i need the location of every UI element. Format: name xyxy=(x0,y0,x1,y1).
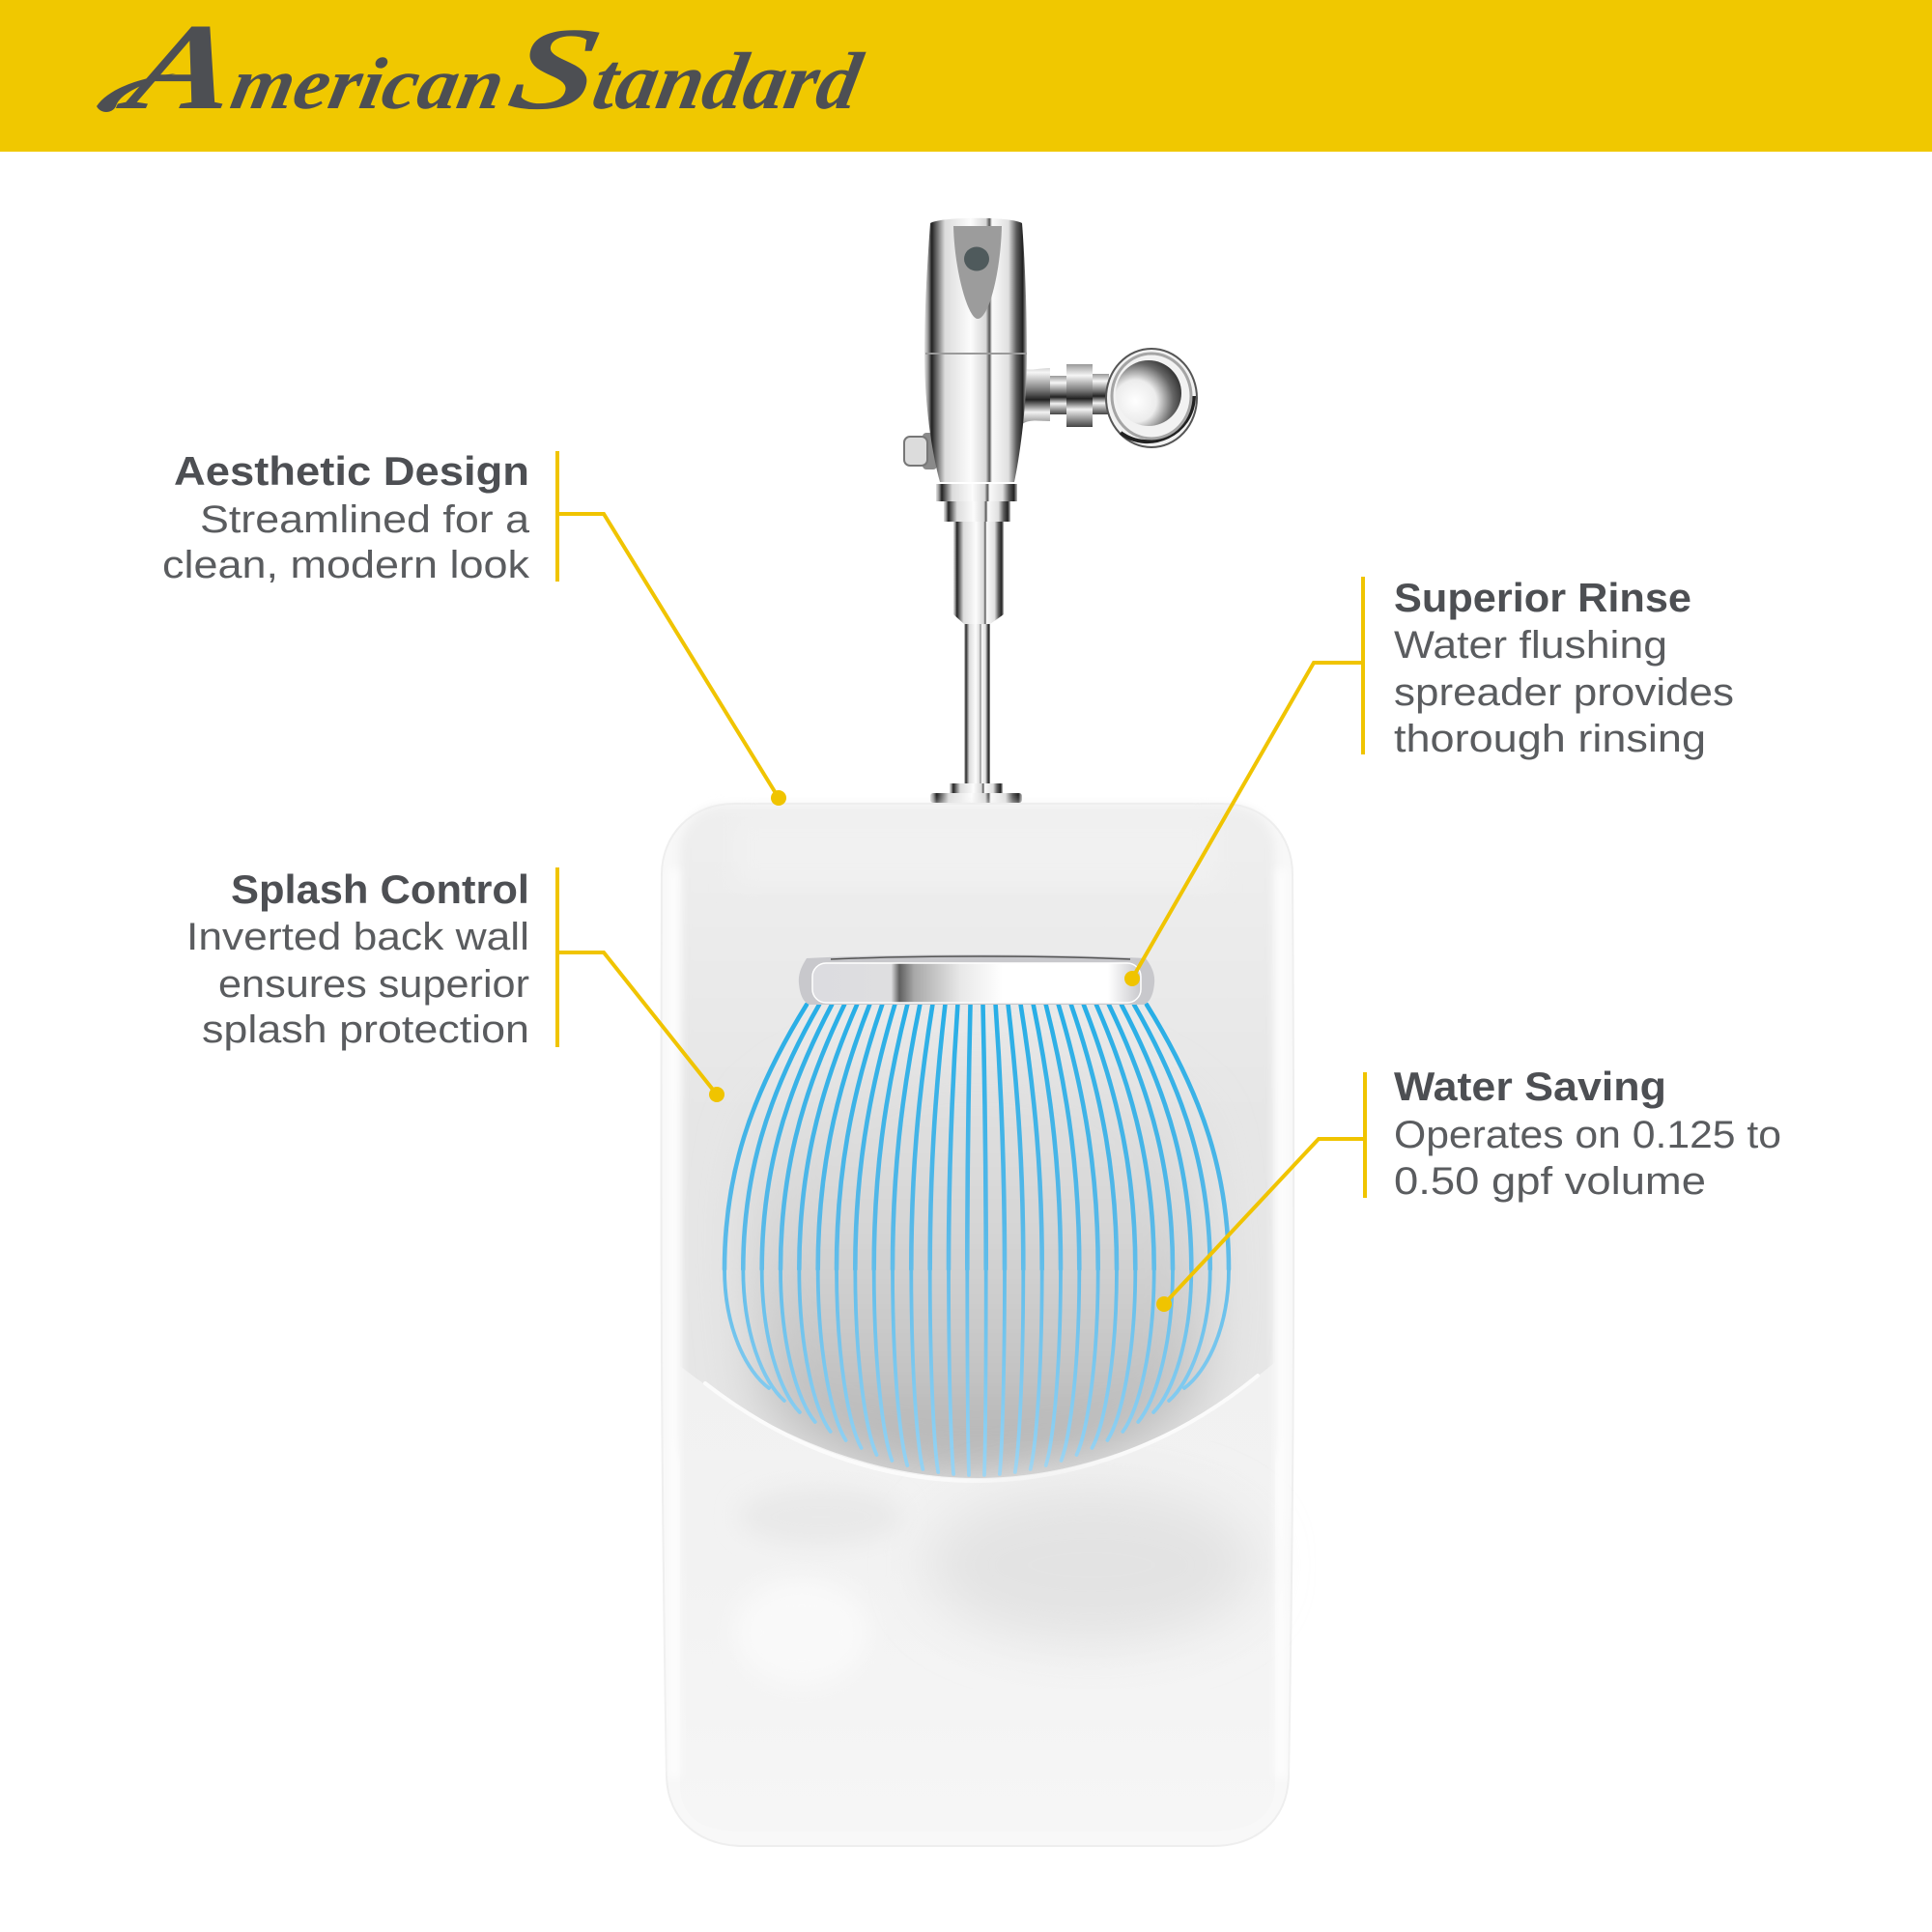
callout heading: Superior Rinse xyxy=(1394,575,1691,620)
logo: American Standard xyxy=(97,0,877,135)
logo wordmark: S xyxy=(499,3,611,134)
valve collar nuts xyxy=(936,484,1017,522)
callout heading: Splash Control xyxy=(231,867,529,912)
valve inlet ring xyxy=(1106,349,1197,447)
valve lower tube xyxy=(953,521,1004,624)
callout body: spreader provides xyxy=(1394,671,1734,714)
callout dot xyxy=(1156,1296,1172,1312)
callout body: Operates on 0.125 to xyxy=(1394,1114,1781,1156)
valve body seam xyxy=(925,353,1027,355)
logo wordmark: merican xyxy=(225,43,511,125)
flush valve xyxy=(904,218,1197,803)
callout dot xyxy=(1124,971,1140,986)
callout body: 0.50 gpf volume xyxy=(1394,1160,1706,1203)
valve sensor window xyxy=(953,226,1002,319)
spreader chrome bar xyxy=(799,954,1154,1005)
callout: Superior Rinse xyxy=(1124,575,1734,986)
callout: Water Saving xyxy=(1156,1064,1781,1312)
basin lower highlight xyxy=(734,1579,869,1686)
callout dot xyxy=(771,790,786,806)
urinal back wall xyxy=(680,806,1275,1482)
callout body: Inverted back wall xyxy=(186,916,529,958)
callout body xyxy=(162,498,530,586)
callout leader line xyxy=(1164,1072,1365,1304)
valve floor flange xyxy=(930,783,1022,803)
basin rim highlight xyxy=(705,1376,1258,1481)
callout body: Water flushing xyxy=(1394,624,1667,667)
callout body: thorough rinsing xyxy=(1394,718,1706,760)
top highlight band xyxy=(734,816,1217,884)
callout heading: Aesthetic Design xyxy=(174,448,529,494)
logo wordmark: tandard xyxy=(586,37,869,127)
callout body xyxy=(186,916,529,1051)
valve supply pipe xyxy=(964,618,990,784)
urinal fixture xyxy=(662,804,1293,1846)
callout: Aesthetic Design xyxy=(162,448,786,806)
water rinse lines xyxy=(724,1005,1229,1475)
callout leader line xyxy=(557,451,779,798)
callout body: clean, modern look xyxy=(162,544,530,586)
callout body: ensures superior xyxy=(218,963,529,1006)
logo swash xyxy=(97,73,176,112)
callout leader line xyxy=(1132,577,1363,979)
callout: Splash Control xyxy=(186,867,724,1102)
callout body xyxy=(1394,624,1734,760)
callout body xyxy=(1394,1114,1781,1203)
valve sensor eye xyxy=(964,247,989,270)
valve side arm xyxy=(1014,359,1109,433)
valve push button xyxy=(904,433,937,469)
water lines upper xyxy=(724,1005,1229,1269)
logo wordmark: A xyxy=(110,0,249,135)
header banner xyxy=(0,0,1932,152)
callout leader line xyxy=(557,867,717,1094)
urinal outer shell xyxy=(662,804,1293,1846)
basin soft shadow right xyxy=(927,1488,1256,1642)
callout body: Streamlined for a xyxy=(200,498,530,541)
callout dot xyxy=(709,1087,724,1102)
water lines lower xyxy=(724,1269,1229,1475)
basin soft shadow left xyxy=(739,1488,903,1546)
shell side highlights xyxy=(674,869,1281,1777)
callout heading: Water Saving xyxy=(1394,1064,1666,1109)
bowl shading xyxy=(749,1051,1209,1478)
valve main body xyxy=(924,218,1027,482)
callout body: splash protection xyxy=(202,1009,529,1051)
basin front xyxy=(680,1362,1275,1832)
